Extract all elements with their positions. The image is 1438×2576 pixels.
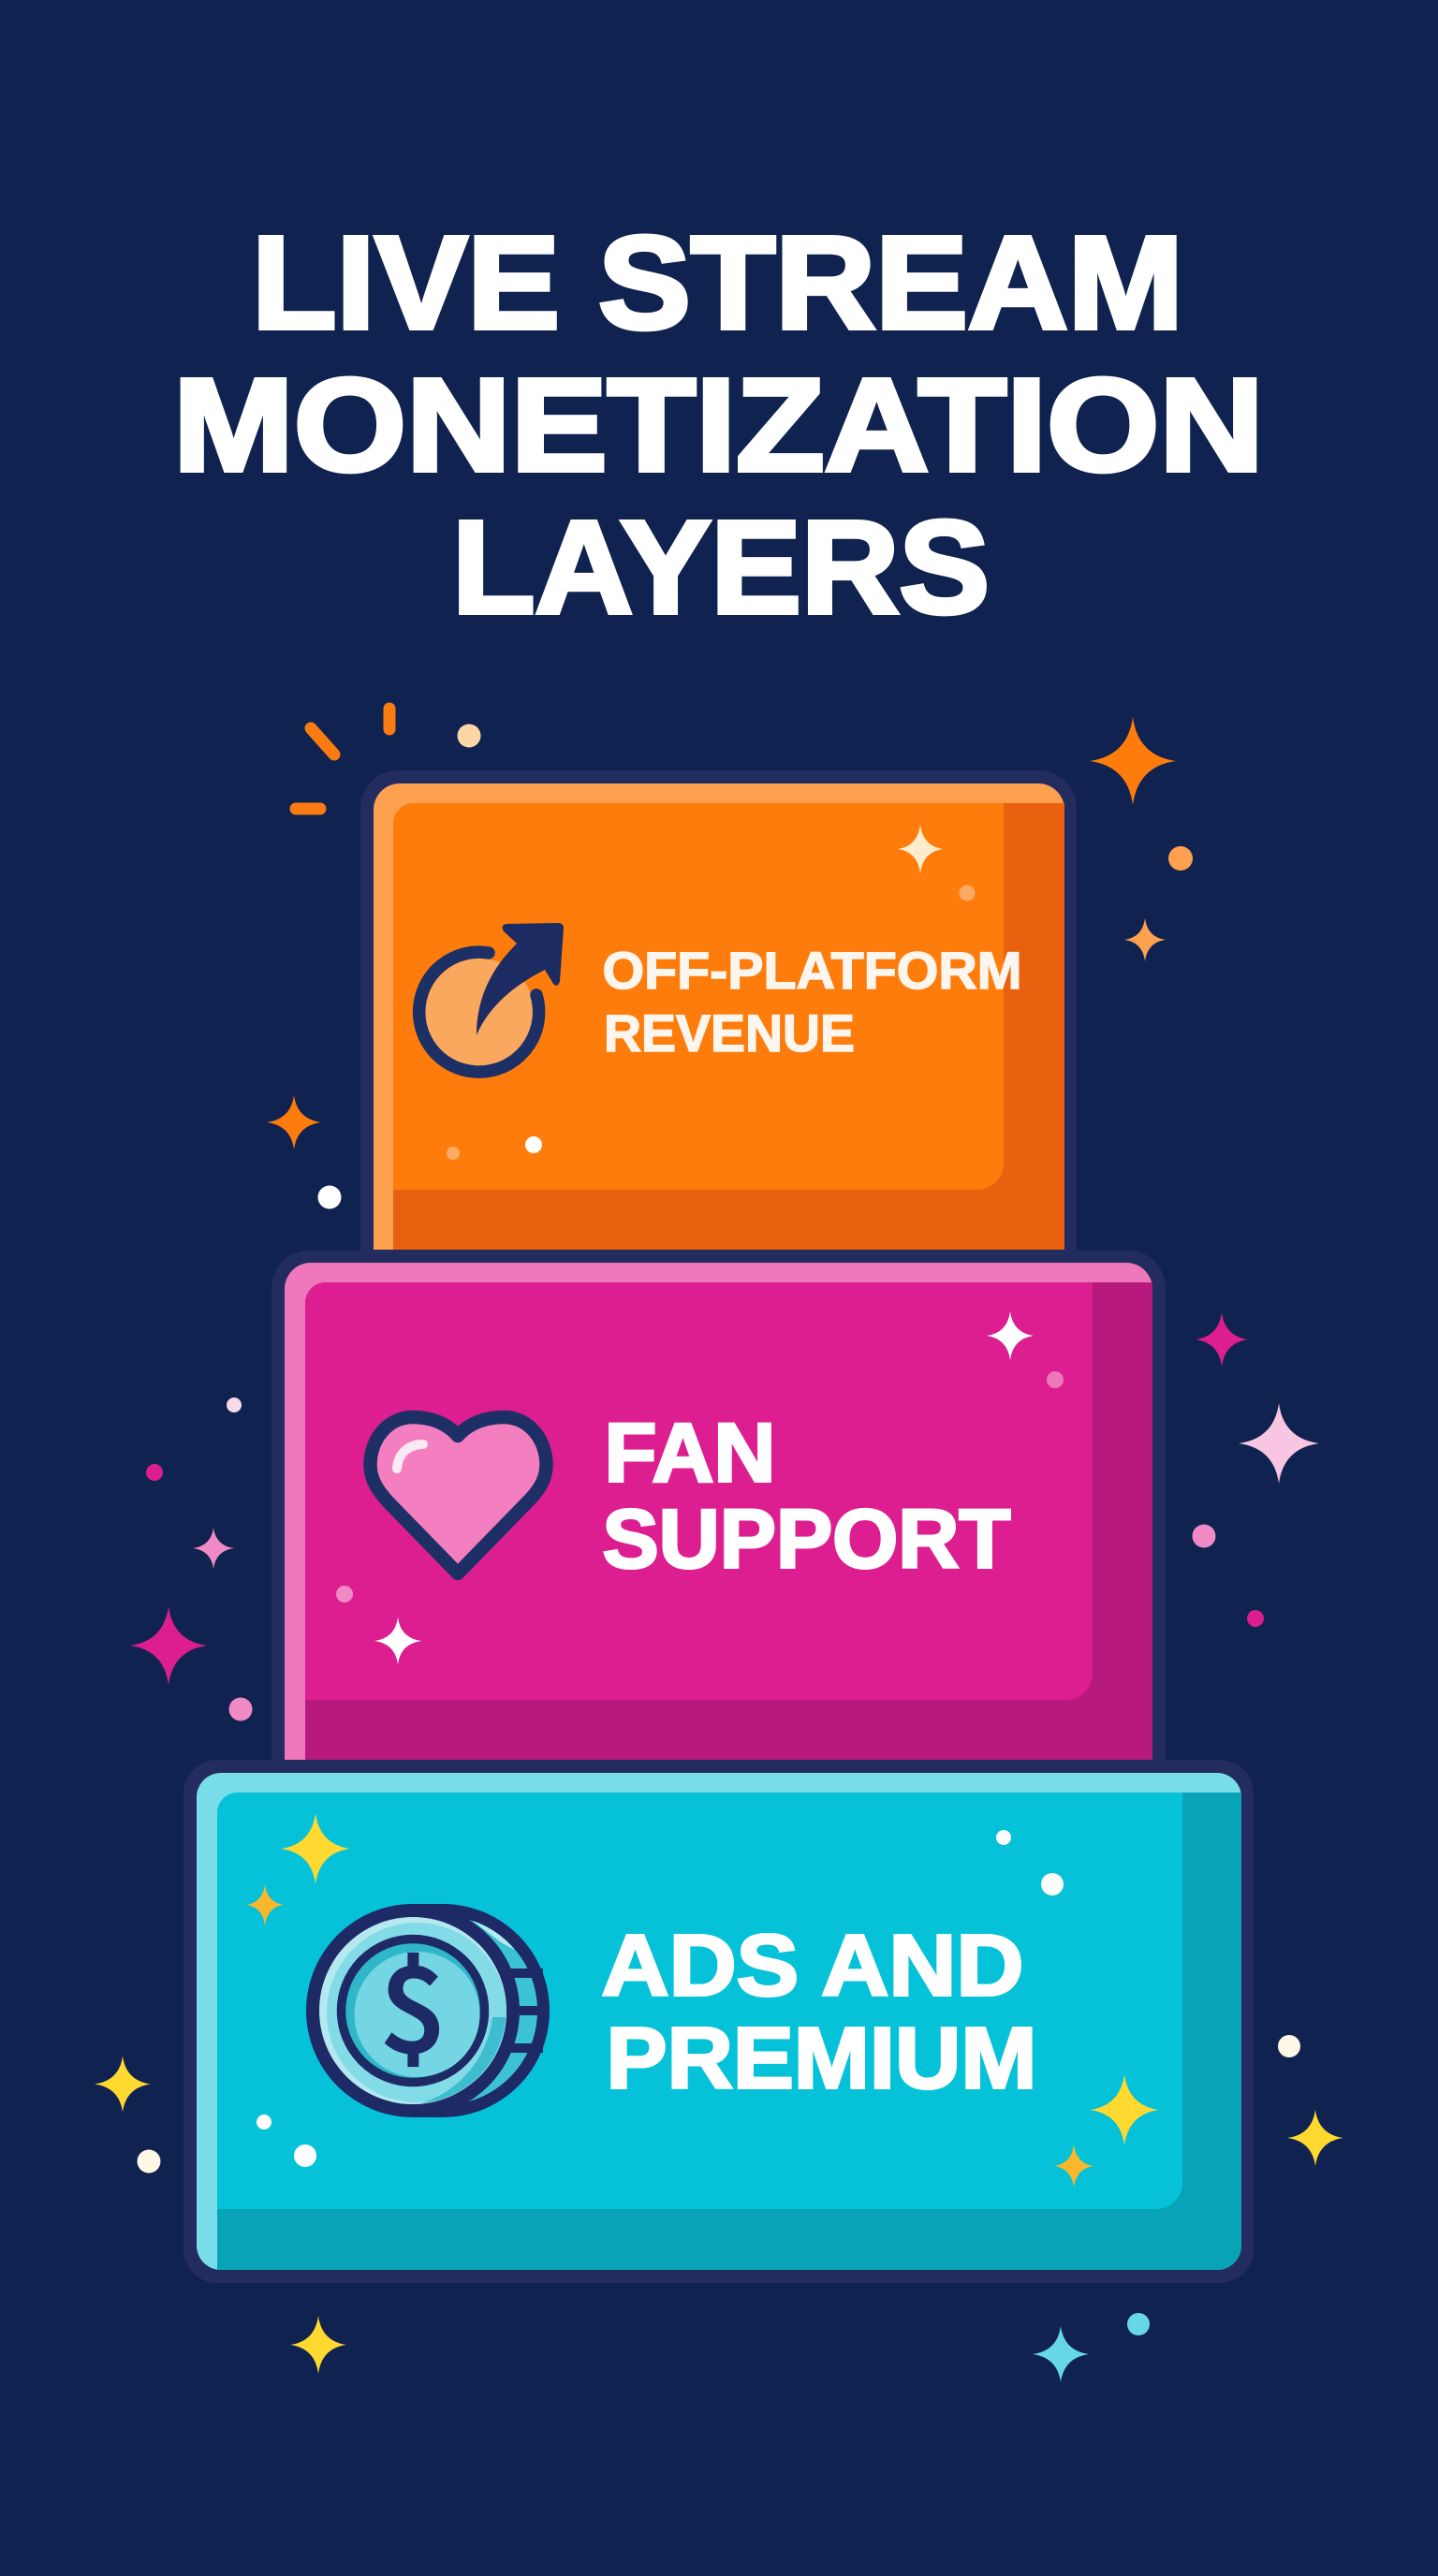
title: LIVE STREAM [252, 208, 1183, 356]
label: ads and premium: PREMIUM [607, 2009, 1037, 2106]
dollar sign: $ [379, 1916, 447, 2086]
label: fan support: FAN [605, 1406, 775, 1500]
panel: ads and premium layer [183, 1760, 1254, 2283]
title: MONETIZATION [173, 350, 1264, 498]
panel: off-platform revenue layer [360, 770, 1077, 1254]
label: ads and premium [601, 1917, 1037, 2106]
label: off-platform revenue: REVENUE [604, 1003, 855, 1062]
panel: fan support layer [271, 1251, 1166, 1764]
label: fan support [603, 1406, 1011, 1586]
label: off-platform revenue [603, 941, 1022, 1062]
label: fan support: SUPPORT [603, 1492, 1011, 1586]
decorations: off-platform sparkles and dots [267, 709, 1193, 1209]
decorations: ads and premium sparkles and dots [95, 1813, 1343, 2382]
title [173, 208, 1264, 640]
icon: circular arrow [419, 923, 564, 1072]
icon: heart [371, 1417, 547, 1573]
label: ads and premium: ADS AND [601, 1917, 1024, 2014]
icon: dollar coin [306, 1904, 550, 2117]
title: LAYERS [452, 492, 990, 640]
decorations: fan support sparkles and dots [130, 1311, 1319, 1720]
label: off-platform revenue: OFF-PLATFORM [603, 941, 1022, 1000]
